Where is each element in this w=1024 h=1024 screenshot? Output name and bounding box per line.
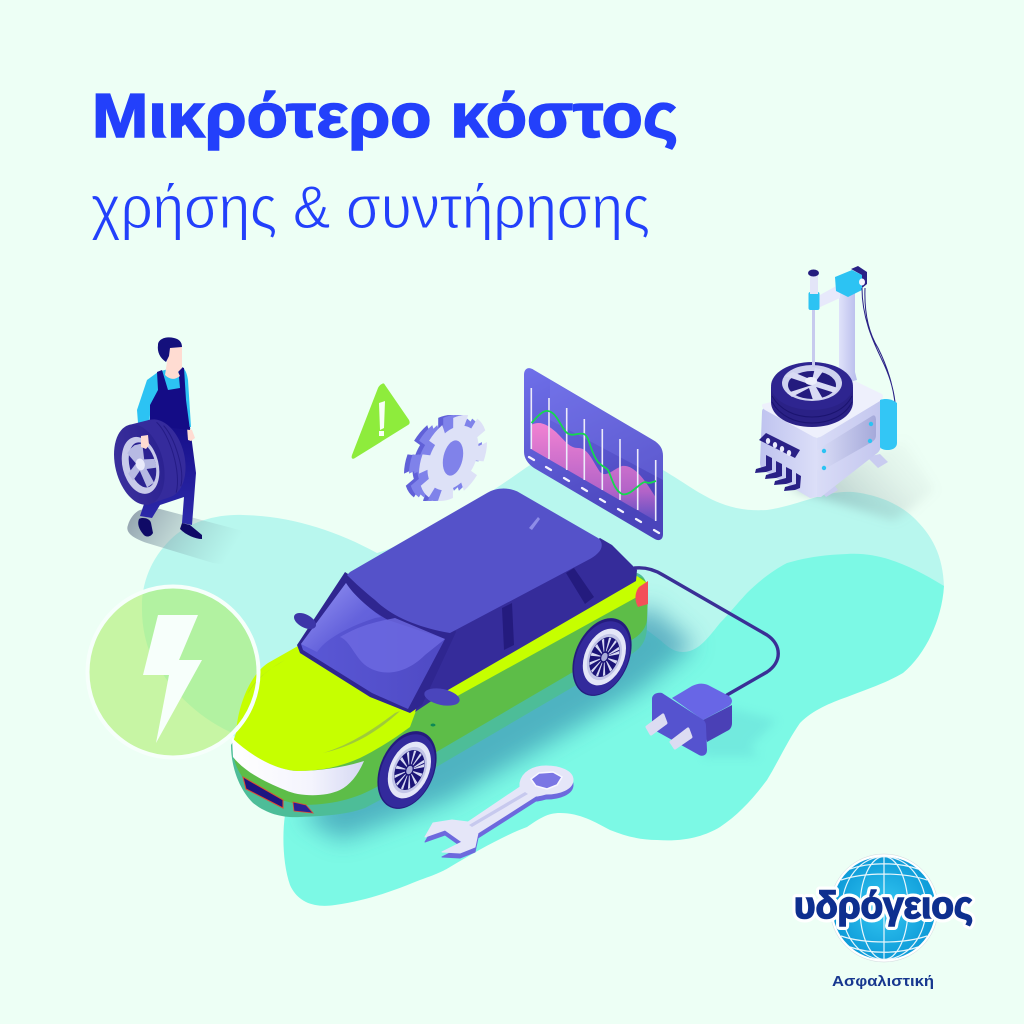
worker ground shadow xyxy=(127,508,247,567)
globe xyxy=(830,854,938,962)
hair xyxy=(158,337,182,362)
side plate xyxy=(816,415,876,471)
tyre xyxy=(771,387,853,427)
green line xyxy=(532,411,656,494)
machine base right face xyxy=(817,397,882,497)
icon: plug xyxy=(647,684,777,757)
windshield xyxy=(301,583,445,709)
subtitle: χρήσης & συντήρησης xyxy=(91,174,650,241)
door handle xyxy=(430,724,436,726)
icon: lightning bolt xyxy=(143,615,202,743)
shirt and arms xyxy=(137,366,191,436)
machine base left face xyxy=(760,408,817,498)
spindle xyxy=(812,305,815,367)
charging cable xyxy=(635,568,778,695)
tyre rim xyxy=(782,365,842,401)
gear extrusion xyxy=(409,411,467,505)
plate rivets xyxy=(822,422,873,470)
tyre changer machine xyxy=(755,266,897,498)
icon: warning triangle xyxy=(352,383,410,459)
panel gloss xyxy=(550,380,663,480)
legs xyxy=(140,417,196,525)
left hand xyxy=(141,435,149,449)
pedals xyxy=(755,455,801,491)
pink area xyxy=(531,423,656,521)
worker xyxy=(106,337,202,539)
front wheel xyxy=(377,721,437,819)
cyan cylinder xyxy=(880,399,897,450)
shoes xyxy=(138,518,153,536)
wrench socket xyxy=(531,772,562,789)
title xyxy=(91,82,678,241)
machine post xyxy=(839,290,857,385)
axis ticks xyxy=(529,457,659,533)
machine base top xyxy=(762,381,883,438)
car xyxy=(231,488,648,819)
grille xyxy=(243,777,283,808)
energy badge: ring and bolt xyxy=(88,586,258,758)
machine arm xyxy=(818,284,840,308)
headlight band xyxy=(232,738,364,795)
light teal background blob xyxy=(142,451,944,790)
icon: wrench xyxy=(425,766,573,858)
machine ground shadow xyxy=(790,440,935,520)
plug shadow xyxy=(700,708,777,757)
tail light xyxy=(635,581,648,607)
right mirror xyxy=(423,685,461,709)
icon: gear xyxy=(409,411,482,505)
gear front face xyxy=(424,411,482,505)
rear wheel xyxy=(572,608,632,706)
panel background xyxy=(524,368,663,540)
control strip xyxy=(759,433,800,458)
car ground shadow xyxy=(300,605,695,840)
title: Μικρότερο κόστος xyxy=(92,82,678,151)
wrench face xyxy=(425,766,573,853)
left mirror xyxy=(291,610,319,632)
bright teal ground blob xyxy=(283,554,944,906)
wrench side xyxy=(425,771,573,858)
machine feet xyxy=(817,454,888,497)
lime side strip xyxy=(447,576,647,699)
energy badge fill xyxy=(88,587,258,757)
brand wordmark: υδρόγειος xyxy=(794,885,973,927)
fog lamp xyxy=(293,802,313,813)
side windows xyxy=(415,538,637,712)
logo xyxy=(794,854,973,990)
vertical bars xyxy=(531,388,656,521)
car hood xyxy=(233,646,420,771)
car green side xyxy=(233,577,648,805)
globe meridians xyxy=(841,856,927,960)
hood crease xyxy=(323,711,400,753)
company type: Ασφαλιστική xyxy=(832,973,934,990)
overall bib xyxy=(150,366,190,430)
car roof xyxy=(347,488,602,633)
right hand xyxy=(187,427,195,441)
cables xyxy=(862,288,895,402)
car lower body xyxy=(231,573,648,817)
carried tyre xyxy=(106,414,194,510)
antenna xyxy=(529,517,540,530)
head xyxy=(165,347,182,379)
cyan head xyxy=(835,270,862,297)
windshield frame xyxy=(297,572,456,713)
chart panel xyxy=(524,368,663,540)
window pillars xyxy=(502,603,514,650)
wordmark weight: υδρόγειος xyxy=(794,885,973,927)
